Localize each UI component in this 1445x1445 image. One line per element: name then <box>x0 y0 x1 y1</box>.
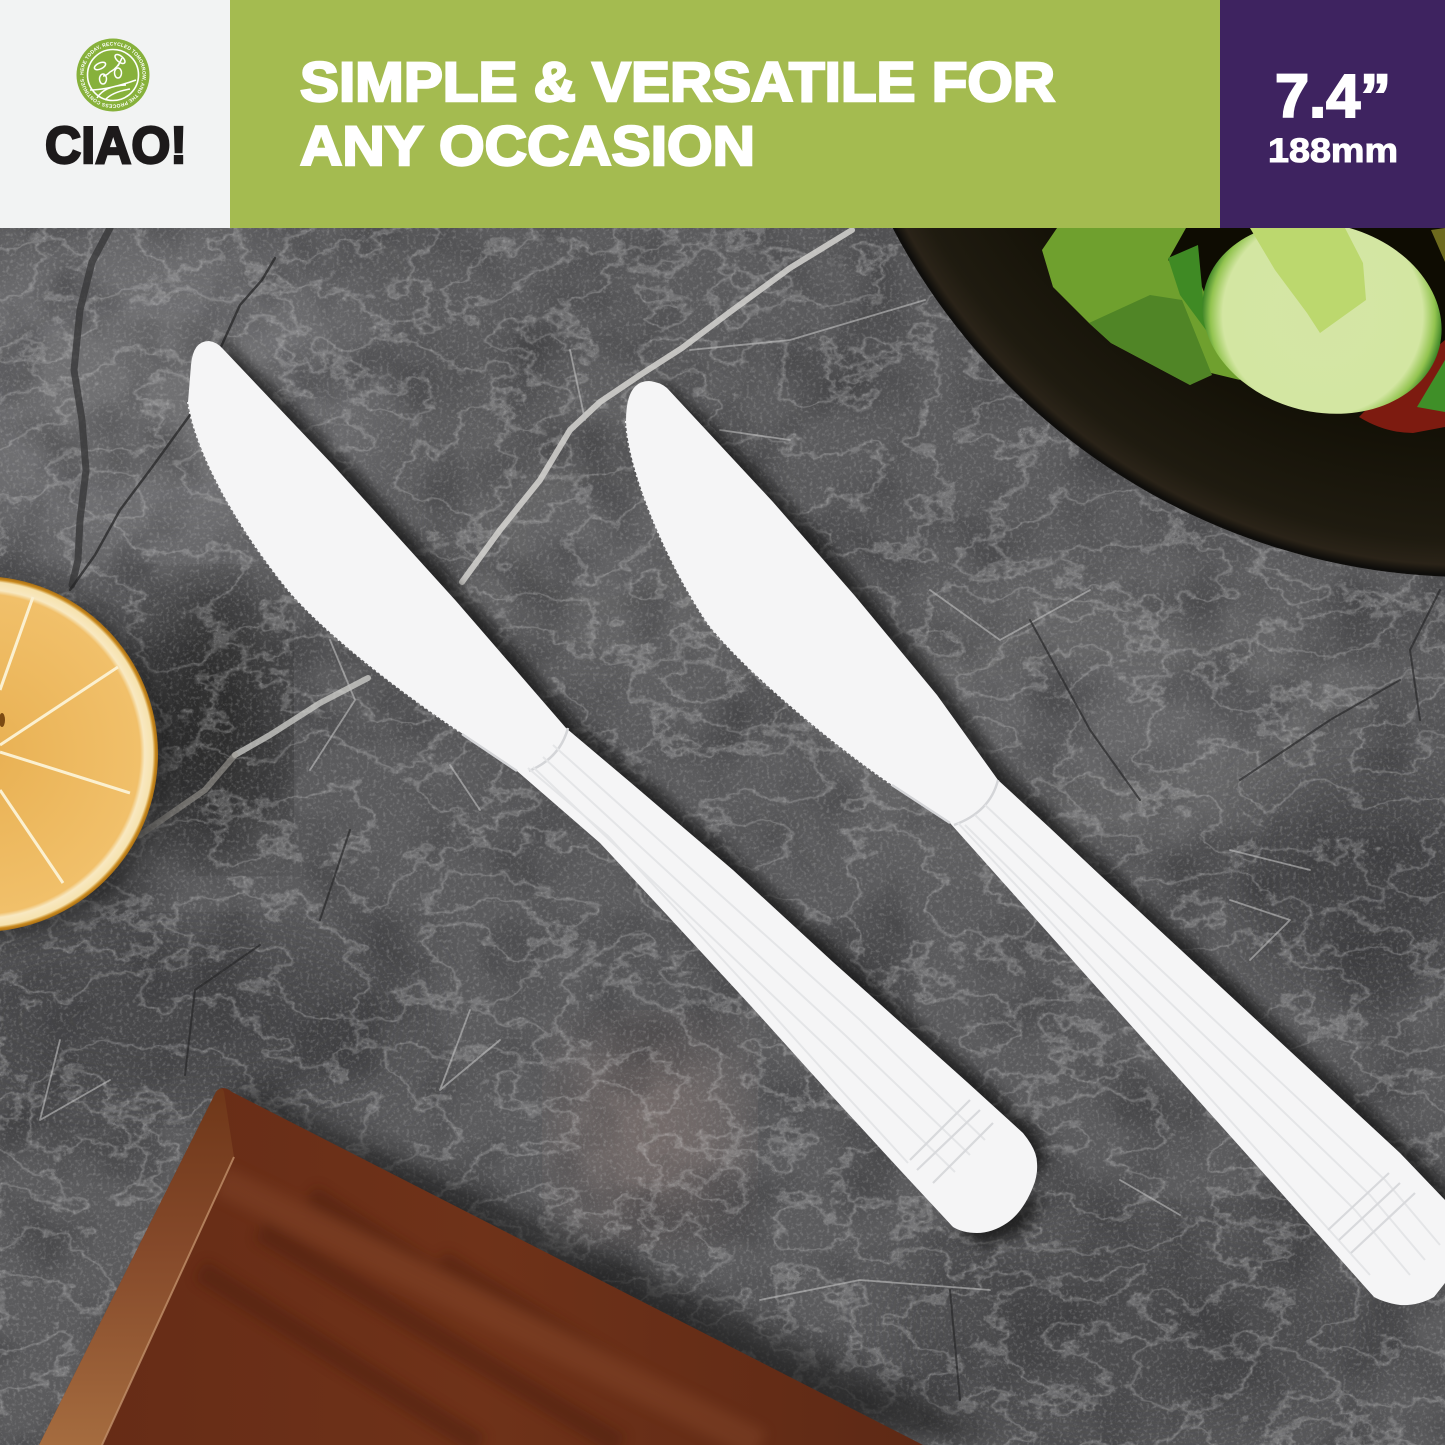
plate with salad <box>818 0 1445 577</box>
marble veins <box>40 228 1440 1400</box>
title line 1: SIMPLE & VERSATILE FOR <box>300 50 1055 113</box>
bolster <box>892 780 998 825</box>
title line 2: ANY OCCASION <box>300 114 755 177</box>
handle ribs <box>528 745 985 1172</box>
red tomato <box>1359 340 1445 433</box>
handle end ribs <box>910 1100 993 1183</box>
cucumber slice <box>1182 198 1445 438</box>
knife 2 <box>626 377 1445 1305</box>
title banner <box>230 0 1220 228</box>
serrated blade edge <box>626 421 892 785</box>
board bevel <box>39 1088 234 1445</box>
logo wordmark: CIAO! <box>45 117 187 175</box>
logo badge: HERE TODAY, RECYCLED TOMORROW, AND THE PROCESS CONTINUES. <box>80 42 146 108</box>
handle end ribs <box>1328 1173 1415 1253</box>
bolster <box>462 728 568 771</box>
serrated blade edge <box>188 402 460 732</box>
knife 1 <box>188 337 1049 1246</box>
size millimetres: 188mm <box>1268 132 1398 170</box>
cutting board <box>39 1084 993 1445</box>
lemon seed <box>0 713 5 727</box>
lemon segment lines <box>0 597 130 883</box>
lemon slice <box>0 576 173 938</box>
lettuce sliver <box>1417 360 1445 412</box>
size badge <box>1220 0 1445 228</box>
size inches: 7.4” <box>1275 62 1391 130</box>
board wood grain <box>200 1180 760 1445</box>
handle ribs <box>958 805 1440 1275</box>
logo panel <box>0 0 230 228</box>
plate <box>818 0 1445 577</box>
lettuce <box>1042 228 1240 385</box>
